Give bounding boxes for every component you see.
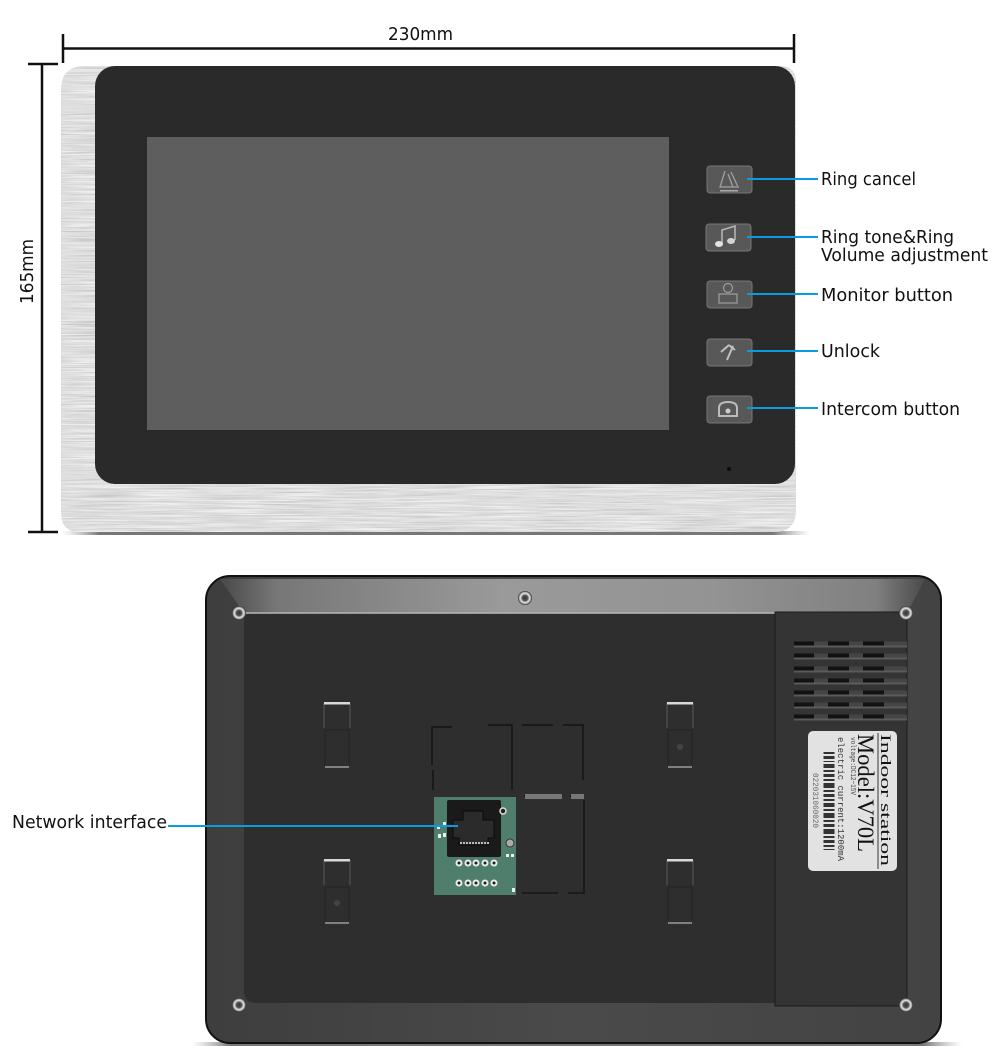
barcode [824, 752, 834, 850]
height dimension: 165mm: 165mm [17, 239, 38, 304]
callout: ring cancel: Ring cancel [821, 169, 916, 190]
mounting slots [324, 702, 693, 924]
height dimension: 165mm [17, 64, 58, 532]
circuit board with network jack [434, 797, 516, 895]
model label sticker: Model:V70L [853, 734, 878, 852]
brushed metal back plate [61, 66, 796, 532]
callout: network interface: Network interface [12, 812, 167, 833]
speaker grille [794, 644, 907, 720]
callout: ring tone and volume: Ring tone&Ring [821, 227, 954, 248]
width dimension: 230mm: 230mm [388, 24, 453, 45]
front view of monitor [61, 66, 810, 535]
rear recessed panel [244, 614, 907, 1003]
button: intercom [707, 396, 752, 423]
model label sticker: electric current:1200mA [835, 737, 845, 862]
callout: unlock [747, 341, 881, 362]
knockout outlines [432, 725, 583, 790]
width dimension: 230mm [63, 24, 794, 63]
button: ring cancel [707, 166, 752, 193]
button: monitor [707, 281, 752, 308]
callout: monitor button: Monitor button [821, 285, 953, 306]
model label sticker: voltage:DC12~15V [848, 737, 856, 796]
screen [147, 137, 669, 430]
black front panel [95, 66, 795, 484]
button: unlock [707, 339, 752, 366]
model label sticker [808, 731, 897, 871]
microphone hole [727, 467, 731, 471]
button: ring tone [706, 224, 751, 251]
callout: unlock: Unlock [821, 341, 881, 362]
rear outer housing [206, 576, 941, 1043]
speaker compartment [775, 612, 907, 1006]
callout: ring tone and volume: Volume adjustment [821, 245, 988, 266]
screws [232, 591, 913, 1012]
callout: intercom button: Intercom button [821, 399, 960, 420]
model label sticker: 022031060020 [810, 773, 819, 828]
model label sticker: Indoor station [877, 734, 893, 867]
rear view of monitor [192, 576, 962, 1046]
callout: ring tone and volume [747, 227, 988, 266]
rear top bevel [220, 579, 925, 613]
